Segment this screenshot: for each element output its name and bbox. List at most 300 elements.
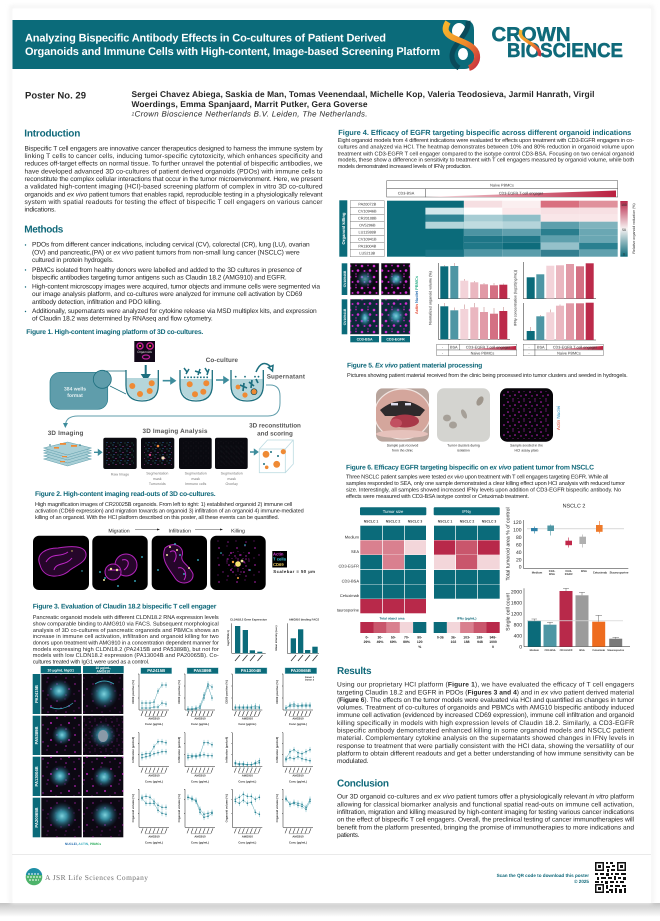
legend: IFN gamma: 949- xyxy=(490,636,496,640)
column headers xyxy=(41,666,124,674)
figure 2 text: High magnification images of CR20025B organoids. From left to right: 1) established organoid 2) immune cell xyxy=(35,501,292,508)
figure 4 text: models demonstrated increased levels of IFNγ production. xyxy=(338,163,472,170)
figure 5: photos xyxy=(374,388,561,452)
text: results: response to treatment that were partially consistent with the HCI data, showing the versatility of our xyxy=(337,743,635,750)
text: conclusion: patients. xyxy=(337,832,360,839)
table: chart B legend: CD3-EGFR T cell engager xyxy=(553,346,598,350)
legend: IFN gamma: 0 xyxy=(492,645,494,649)
chart: NSCLC 2 box plot: EGFR xyxy=(565,572,573,576)
text: results xyxy=(337,682,635,765)
figure 6: IFN gamma heatmap xyxy=(434,507,500,599)
text: methods bullets: Additionally, supernatants were analyzed for cytokine release via MSD multiplex kits, and expression xyxy=(32,308,317,315)
chart row 2, PA13004B: Infiltration (µm/cell) xyxy=(224,737,228,763)
heading: Methods: Methods xyxy=(24,225,64,236)
icon: cube xyxy=(259,440,293,473)
image captions: Overlay xyxy=(226,482,238,486)
figure 6 text: samples responded to SEA, only one sample demonstrated a clear killing effect upon HCI analysis with reduced tumor xyxy=(346,480,625,487)
text: introduction: have developed advanced 3D co-cultures of patient derived organoids (PDOs) with immune cells to xyxy=(24,168,323,175)
legend: IFN gamma: 1000 xyxy=(489,640,497,644)
image captions: Segmentation xyxy=(146,472,168,476)
figure 3: dose response column headers: PA5389B xyxy=(194,668,212,673)
chart: single cell count: 400 xyxy=(514,634,522,640)
chart: NSCLC 2 box plot: 60 xyxy=(516,542,522,548)
text: conclusion xyxy=(337,794,635,839)
text: introduction: reduces off-target effects on normal tissue. To further unravel the potential of bispecific antibodies, we xyxy=(24,161,323,168)
legend: total object area: 50- xyxy=(391,636,396,640)
table: chart B legend: BSA xyxy=(537,346,545,350)
table: chart A legend xyxy=(437,344,517,356)
chart row 3, PA20065B: Organoid volume (%) xyxy=(275,794,279,822)
figure 2 text xyxy=(35,501,304,521)
table: chart B legend: - xyxy=(528,351,530,355)
figure 6 text xyxy=(346,473,625,500)
chart row 1, PA2415B xyxy=(131,674,169,726)
figure 3: dose response column headers: PA20065B xyxy=(291,668,311,673)
row labels xyxy=(337,536,359,612)
figure 3 text: increase in immune cell activation, infiltration and organoid killing for two xyxy=(33,633,219,640)
image: immune mask xyxy=(179,438,212,469)
table: chart B legend xyxy=(523,344,603,356)
rotated stain label: Actin Nuclei PBMCs xyxy=(414,275,419,314)
footer note: Scan the QR code to download this poster xyxy=(497,873,589,878)
chart: AMG910 binding FACS: Mean intensity (a.u.) xyxy=(275,625,278,650)
figure 6 title: Figure 6. Efficacy EGFR targeting bispecific on ex vivo patient tumor from NSCLC xyxy=(346,465,594,472)
footer logo: JSR: A JSR Life Sciences Company xyxy=(45,873,148,882)
row labels: SEA xyxy=(351,549,359,554)
row headers xyxy=(33,674,40,837)
image captions: mask xyxy=(191,477,200,481)
chart: NSCLC 2 box plot xyxy=(506,504,629,581)
text: introduction: a validated high-content imaging (HCI)-based screening platform of complex in vitro 3D co-cultured xyxy=(24,184,323,191)
text: introduction: linking T cells to cancer cells, inducing tumor-specific cytotoxicity, which enhances specificity and xyxy=(24,153,323,160)
photo: seeded xyxy=(500,388,553,442)
legend: total object area: 69% xyxy=(390,640,397,644)
text: methods bullets: (OV) and pancreatic,(PA) or ex vivo patient tumors from non-small lung cancer (NSCLC) were xyxy=(32,249,300,256)
figure 2: stage labels and arrows: Infiltration xyxy=(168,528,191,534)
column headers: AMG910 xyxy=(97,670,110,674)
image: organoids xyxy=(134,341,155,362)
legend: IFN gamma: IFNγ (pg/mL) xyxy=(457,616,476,620)
text: conclusion: Our 3D organoid co-cultures and ex vivo patient tumors offer a physiologically relevant in vitro platform xyxy=(337,794,634,801)
chart: single cell count: Cetuximab xyxy=(592,649,606,652)
side label: organoid killing: Organoid killing xyxy=(341,212,346,244)
chart: single cell count: CD3-EGFR xyxy=(560,649,573,652)
row headers: PA5389B xyxy=(34,726,39,744)
figure 3 text: cultures treated with IgG1 were used as a control. xyxy=(33,658,150,665)
chart: NSCLC 2 box plot: CD3- xyxy=(549,569,555,573)
colour bar xyxy=(620,201,636,257)
plate: 384 wells xyxy=(50,370,126,409)
legend: IFN gamma: 0-36 xyxy=(437,636,444,640)
chart row 3, PA13004B xyxy=(224,789,262,844)
chart: NSCLC 2 box plot: 80 xyxy=(516,535,522,541)
chart row 1, PA13004B: Conc (µg/mL) xyxy=(238,722,256,726)
row labels: Medium xyxy=(345,534,360,539)
text: methods bullets: antibody detection, infiltration and PDO killing. xyxy=(32,299,162,306)
row labels: CD3-BSA xyxy=(342,578,359,583)
chart: single cell count: Staurosporine xyxy=(607,649,625,652)
chart row 2, PA5389B: AMG910 xyxy=(194,774,206,778)
chart row 3, PA13004B: AMG910 xyxy=(242,834,253,838)
colour bar: Relative organoid reduction (%) xyxy=(632,203,636,254)
photo captions: from the clinic xyxy=(392,448,413,452)
figure 2 legend xyxy=(272,551,315,574)
chart row 1, PA5389B: CD69 positive (%) xyxy=(177,680,181,704)
arrow xyxy=(216,377,228,383)
text: introduction xyxy=(24,145,323,214)
row labels: OV5296B xyxy=(359,224,376,228)
chart row 3, PA2415B: Conc (µg/mL) xyxy=(145,840,163,844)
chart: CLDN18.2 gene expression: CLDN18.2 Gene Expression xyxy=(230,618,267,622)
heatmap header: CD3-EGFR T cell engager xyxy=(499,192,544,196)
image captions: mask xyxy=(153,477,162,481)
chart row 2, PA20065B: Infiltration (µm/cell) xyxy=(275,737,279,763)
image: infiltration xyxy=(152,536,207,590)
chart row 2, PA20065B: AMG910 xyxy=(292,774,304,778)
figure 2 text: killing of an organoid. With the HCI platform described on this poster, all these events can be quantified. xyxy=(35,514,279,521)
chart row 2, PA2415B xyxy=(131,733,169,784)
figure 4 text: Eight organoid models from 4 different indications were evaluated for effects upon treatment with CD3-EGFR engagers in co- xyxy=(338,137,634,144)
figure 2 text: activation (CD69 expression) and migration towards an organoid 3) infiltration of an organoid 4) immune-mediated xyxy=(35,507,304,514)
row labels: LU5213B xyxy=(359,252,376,256)
text: conclusion: infiltration, migration and killing measured by high-content imaging for testing various cancer indications xyxy=(337,809,635,816)
poster number: Poster No. 29 xyxy=(25,90,86,102)
row labels: CV10941B xyxy=(343,308,347,325)
chart row 1, PA20065B xyxy=(275,674,315,726)
legend: IFN gamma: 948 xyxy=(477,640,483,644)
text: methods bullets: High-content microscopy images were acquired, tumor objects and immune cells were segmented via xyxy=(32,284,320,291)
chart row 1, PA20065B: Conc (µg/mL) xyxy=(289,722,307,726)
figure 3: dose response column headers: PA2415B xyxy=(147,668,165,673)
image: tumoroids mask xyxy=(141,438,174,469)
chart row 3, PA5389B: Conc (µg/mL) xyxy=(191,840,209,844)
heatmap cells xyxy=(387,201,618,257)
chart row 1, PA5389B: AMG910 xyxy=(194,716,206,720)
figure 6: IFN gamma heatmap: NSCLC 1 xyxy=(438,520,452,524)
row headers: PA20065B xyxy=(34,807,39,828)
figure 2 legend: CD69 xyxy=(273,562,284,567)
icon: image stack xyxy=(44,442,92,466)
title: Organoids and Immune Cells with High-content, Image-based Screening Platform xyxy=(25,46,440,58)
chart row 2, PA5389B: Conc (µg/mL) xyxy=(191,780,209,784)
figure 4 title: Figure 4. Efficacy of EGFR targeting bispecific across different organoid indications xyxy=(338,128,631,137)
chart row 2, PA13004B xyxy=(224,733,262,784)
chart row 3, PA2415B: AMG910 xyxy=(148,834,160,838)
chart: NSCLC 2 box plot: Medium xyxy=(532,570,543,574)
photo captions: isolation xyxy=(457,448,470,452)
row labels: Staurosporine xyxy=(334,608,360,613)
text: results: immune cell activation (evidenced by increased CD69 expression), immune cell infiltration and organoid xyxy=(337,712,634,719)
legend: total object area: 70- xyxy=(404,636,409,640)
label: reconstitution xyxy=(249,423,301,437)
colour bar: 50 xyxy=(622,228,626,232)
organoid images xyxy=(41,674,123,837)
figure 4: heatmap xyxy=(339,181,636,257)
legend: total object area: 89% xyxy=(403,640,410,644)
text: introduction: Bispecific T cell engagers are innovative cancer therapeutics designed to harness the immune system by xyxy=(24,145,323,152)
chart: NSCLC 2 box plot: 100 xyxy=(513,527,522,533)
label: co-culture: Co-culture xyxy=(206,357,238,364)
logo: Crown Bioscience: CROWN xyxy=(492,24,570,46)
chart row 2, PA5389B: Infiltration (µm/cell) xyxy=(177,737,181,763)
photo captions: Sample just received xyxy=(387,444,418,448)
figure 6: IFN gamma heatmap: IFNγ xyxy=(462,509,472,514)
table: chart A legend: - xyxy=(442,346,444,350)
chart: single cell count: 1600 xyxy=(511,600,522,606)
chart row 3, PA5389B xyxy=(177,789,215,844)
legend: total object area: Total object area xyxy=(379,616,405,620)
text: introduction: reconstitute the complex cellular interactions that occur in the tumor microenvironment. Here, we present xyxy=(24,176,323,183)
chart row 2, PA13004B: Conc (µg/mL) xyxy=(238,780,256,784)
figure 6: tumor size heatmap: NSCLC 2 xyxy=(386,520,400,524)
chart row 3, PA20065B: Conc (µg/mL) xyxy=(289,840,307,844)
photo captions: Tumor clusters during xyxy=(447,444,480,448)
figure 2: stage labels and arrows xyxy=(108,528,245,534)
legend: IFN gamma: 188 xyxy=(464,640,470,644)
text: introduction: organoids and ex vivo patient tumors that enables rapid, reproducible testing in a physiologically relevant xyxy=(24,191,323,198)
table: chart A legend: Naive PBMCs xyxy=(471,351,494,355)
chart row 1, PA2415B: CD69 positive (%) xyxy=(131,680,135,704)
chart: single cell count: CD3-BSA xyxy=(544,649,556,652)
chart: AMG910 binding FACS xyxy=(275,618,319,661)
chart: NSCLC 2 box plot: BSA xyxy=(549,572,555,576)
chart row 1, PA20065B: Donor 2 xyxy=(305,679,315,682)
image: killing xyxy=(210,536,266,590)
row labels: PA13004B xyxy=(358,245,377,249)
chart row 1, PA13004B xyxy=(224,674,262,726)
legend: IFN gamma xyxy=(434,616,500,649)
legend: IFN gamma: 36- xyxy=(451,636,456,640)
photo captions xyxy=(387,444,543,452)
image: overlay xyxy=(215,438,248,469)
chart: NSCLC 2 box plot: 20 xyxy=(516,557,522,563)
chart: CLDN18.2 gene expression xyxy=(227,618,267,661)
plate: 384 wells: 384 wells xyxy=(64,386,86,392)
image captions: Tumoroids xyxy=(149,482,166,486)
figure 3 text: analysis of 3D co-cultures of pancreatic organoids and PBMCs shows an xyxy=(33,627,219,634)
heatmap header: Naïve PBMCs xyxy=(490,184,514,188)
figure 3 text: models expressing high CLDN18.2 (PA2415B and PA5389B), but not for xyxy=(33,646,219,653)
arrow: supernatant xyxy=(256,363,273,372)
chart: single cell count: Single cell count xyxy=(506,593,512,631)
image: migration xyxy=(92,536,148,590)
chart: NSCLC 2 box plot: 120 xyxy=(513,520,522,526)
figure 6 text: effects were measured with CD3-BSA isotype control or Cetuximab treatment. xyxy=(346,493,529,500)
chart row 1, PA5389B: Conc (µg/mL) xyxy=(191,722,209,726)
legend: IFN gamma: 103- xyxy=(463,636,470,640)
text: methods bullets: PBMCs isolated from healthy donors were labelled and added to the 3D cultures in presence of xyxy=(32,267,302,274)
legend: IFN gamma: 102 xyxy=(451,640,456,644)
chart: single cell count: BSA xyxy=(579,649,585,652)
title: Analyzing Bispecific Antibody Effects in Co-cultures of Patient Derived xyxy=(25,32,386,44)
authors: Crown Bioscience Netherlands B.V. Leiden, The Netherlands. xyxy=(135,110,368,118)
arrow: connector xyxy=(66,385,280,425)
legend: total object area: 30- xyxy=(378,636,382,640)
label: analysis: 3D Imaging Analysis xyxy=(142,428,208,435)
figure 2: stage labels and arrows: Killing xyxy=(231,528,245,534)
chart: NSCLC 2 box plot: BSA xyxy=(581,569,587,573)
image captions: Segmentation xyxy=(221,472,243,476)
heatmap header xyxy=(387,181,618,197)
chart row 2, PA20065B: Conc (µg/mL) xyxy=(289,780,307,784)
chart: normalized organoid volume: Normalized organoid volume (%) xyxy=(428,271,432,325)
text: methods bullets xyxy=(25,242,320,323)
label: reconstitution: 3D reconstitution xyxy=(249,423,301,430)
well 2 xyxy=(180,368,213,401)
figure 3 image caption: NUCLEI, ACTIN, PBMCs xyxy=(65,842,101,846)
chart row 1, PA20065B: Donor 1 xyxy=(305,676,315,679)
image: organoids: Organoids xyxy=(137,350,152,354)
image captions: mask xyxy=(227,477,236,481)
text: results: killing specifically in models with high expression levels of Claudin 18.2. Similarly, a CD3-EGFR xyxy=(337,720,634,727)
text: introduction: indications. xyxy=(24,207,56,214)
chart: single cell count: 800 xyxy=(514,623,522,629)
figure 2: stage labels and arrows: Migration xyxy=(108,528,130,534)
arrow xyxy=(142,365,149,380)
chart row 1, PA20065B: CD69 positive (%) xyxy=(275,680,279,704)
colour bar: 100 xyxy=(621,203,627,207)
banner xyxy=(12,20,477,69)
figure 3 text: show comparable binding to AMG910 via FACS. Subsequent morphological xyxy=(33,620,219,627)
chart: NSCLC 2 box plot: Staurosporine xyxy=(610,570,629,574)
table: chart A legend: CD3-EGFR T cell engager xyxy=(466,346,511,350)
text: methods bullets: cultured in protein hydrogels. xyxy=(32,257,114,264)
heading: Results: Results xyxy=(337,666,372,677)
chart: single cell count xyxy=(506,588,630,652)
label: 3D imaging: 3D Imaging xyxy=(48,430,84,437)
footer note xyxy=(497,873,589,884)
chart: CLDN18.2 gene expression: log2(TPM+1) xyxy=(227,630,230,646)
chart row 3, PA2415B: Organoid volume (%) xyxy=(131,794,135,822)
row labels: CR20108B xyxy=(358,217,377,221)
chart: AMG910 binding FACS: AMG910 binding FACS xyxy=(289,618,319,622)
photo: sample xyxy=(374,388,430,442)
heatmap header: CD3-BSA xyxy=(398,192,415,196)
image: organoid xyxy=(33,536,89,590)
side label: organoid killing xyxy=(339,200,347,257)
well 1 xyxy=(126,370,158,401)
rotated stain label: Actin Nuclei xyxy=(556,406,561,430)
row labels xyxy=(342,263,347,334)
figure 4 text xyxy=(338,137,634,170)
chart: IFN gamma concentration: IFNγ concentration (log10(ng/mL)) xyxy=(514,270,518,326)
chart row 2, PA13004B: AMG910 xyxy=(242,774,253,778)
figure 6 text: size. Interestingly, all samples showed increased IFNγ levels upon addition of CD3-EGFR bispecific antibody. No xyxy=(346,487,621,494)
chart: normalized organoid volume xyxy=(428,263,510,339)
chart: NSCLC 2 box plot: 40 xyxy=(516,550,522,556)
figure 2 legend: Scalebar = 50 µm xyxy=(273,569,315,574)
chart row 1, PA13004B: AMG910 xyxy=(242,716,253,720)
chart: NSCLC 2 box plot: NSCLC 2 xyxy=(563,504,585,510)
row labels: CD3-EGFR xyxy=(339,564,359,569)
heading: Conclusion: Conclusion xyxy=(337,778,389,789)
text: results: platform to obtain different readouts and get a better understanding of how immune sensitivity can be xyxy=(337,750,634,757)
table: chart B legend: Naive PBMCs xyxy=(557,351,581,355)
chart row 3, PA20065B: AMG910 xyxy=(292,834,304,838)
legend: IFN gamma: 189- xyxy=(477,636,483,640)
column labels xyxy=(350,336,410,342)
authors xyxy=(132,89,594,118)
authors: 1 xyxy=(132,112,134,118)
text: results: bispecific antibody demonstrated enhanced killing in some organoid models and NSCLC patient xyxy=(337,728,634,734)
text: methods bullets: PDOs from different cancer indications, including cervical (CV), colorectal (CR), lung (LU), ovarian xyxy=(32,242,310,249)
label: reconstitution: and scoring xyxy=(257,430,293,437)
legend: total object area: 29% xyxy=(364,640,370,644)
colour bar: 0 xyxy=(623,252,625,256)
plate: 384 wells: format xyxy=(67,393,83,399)
figure 3 text: Pancreatic organoid models with different CLDN18.2 RNA expression levels xyxy=(33,614,219,621)
figure 3 text: donors upon treatment with AMG910 in a concentration dependent manner for xyxy=(33,640,219,647)
chart row 3, PA13004B: Conc (µg/mL) xyxy=(238,840,256,844)
text: conclusion: benefit from the platform presented, bringing the promise of immunotherapies to more indications and xyxy=(337,824,634,831)
well 3 xyxy=(231,370,263,401)
chart row 3, PA5389B: Organoid volume (%) xyxy=(177,794,181,822)
figure 2: microscopy images xyxy=(33,536,266,590)
row labels: PA20072B xyxy=(358,203,377,207)
chart row 3, PA5389B: AMG910 xyxy=(194,834,206,838)
chart row 1, PA2415B: AMG910 xyxy=(148,716,160,720)
text: methods bullets: of Claudin 18.2 was determined by RNAseq and flow cytometry. xyxy=(32,316,213,323)
text: results: Using our proprietary HCI platform (Figure 1), we have evaluated the efficacy of T cell engagers xyxy=(337,682,635,689)
figure 6: tumor size heatmap: NSCLC 3 xyxy=(408,520,422,524)
chart row 2, PA2415B: Conc (µg/mL) xyxy=(145,780,163,784)
column headers: 10 µg/mL, xyxy=(95,666,111,670)
figure 4 text: models, these show a difference in sensitivity to treatment with T cell engagers measured by organoid volume, while both xyxy=(338,157,634,164)
photo: clusters xyxy=(437,388,490,442)
figure 3: dose response charts xyxy=(131,674,315,844)
icon: helix xyxy=(446,21,477,68)
image captions: Segmentation xyxy=(185,472,207,476)
chart row 1, PA13004B: CD69 positive (%) xyxy=(224,680,228,704)
row headers: PA13004B xyxy=(34,766,39,786)
row labels: CV10946B xyxy=(358,210,377,214)
chart row 2, PA20065B xyxy=(275,733,313,784)
legend: total object area: 0- xyxy=(365,636,369,640)
chart row 1, PA20065B: AMG910 xyxy=(292,716,304,720)
figure 6: IFN gamma heatmap: NSCLC 3 xyxy=(482,520,496,524)
arrow xyxy=(94,450,102,455)
figure 1 title: Figure 1. High-content imaging platform of 3D co-cultures. xyxy=(26,329,203,336)
figure 5 title: Figure 5. Ex vivo patient material processing xyxy=(347,362,482,369)
row headers: PA2415B xyxy=(34,685,39,703)
figure 6: IFN gamma heatmap: NSCLC 2 xyxy=(460,520,474,524)
title xyxy=(25,32,440,58)
chart row 2, PA2415B: Infiltration (µm/cell) xyxy=(131,737,135,763)
authors: Sergei Chavez Abiega, Saskia de Man, Tomas Veenendaal, Michelle Kop, Valeria Teodosieva, Jarmil Hanrath, Virgil xyxy=(132,89,594,99)
text: results: targeting Claudin 18.2 and EGFR in PDOs (Figures 3 and 4) and in ex vivo patient derived material xyxy=(337,689,635,696)
table: chart B legend: - xyxy=(528,346,530,350)
image captions xyxy=(111,472,243,486)
row labels: LU11588B xyxy=(358,231,377,235)
legend: total object area: 49% xyxy=(377,640,383,644)
chart: NSCLC 2 box plot: Cetuximab xyxy=(593,570,607,574)
photo captions: Sample seeded in the xyxy=(510,444,543,448)
QR code xyxy=(595,862,626,893)
text: introduction: system with spatial readouts for testing the effect of bispecific T cell engagers on various cancer xyxy=(24,199,323,206)
chart: single cell count: 2000 xyxy=(511,589,522,595)
figure 6: tumor size heatmap: Tumor size xyxy=(383,509,404,514)
footer logo: JSR xyxy=(26,868,148,885)
figure 1: diagram xyxy=(44,341,306,486)
figure 6 text: Three NSCLC patient samples were tested ex vivo upon treatment with T cell engagers targeting EGFR. While all xyxy=(346,473,608,480)
row labels: CV10941B xyxy=(358,238,377,242)
row labels: Cetuximab xyxy=(340,593,360,598)
chart: single cell count: 1200 xyxy=(511,612,522,618)
boxes xyxy=(531,521,603,548)
figure 4 text: cultures and analyzed via HCI. The heatmap demonstrates between 10% and 80% reduction in organoid volume upon xyxy=(338,144,634,151)
figure 2 legend: Actin xyxy=(273,552,284,557)
chart: NSCLC 2 box plot: CD3- xyxy=(565,569,572,573)
